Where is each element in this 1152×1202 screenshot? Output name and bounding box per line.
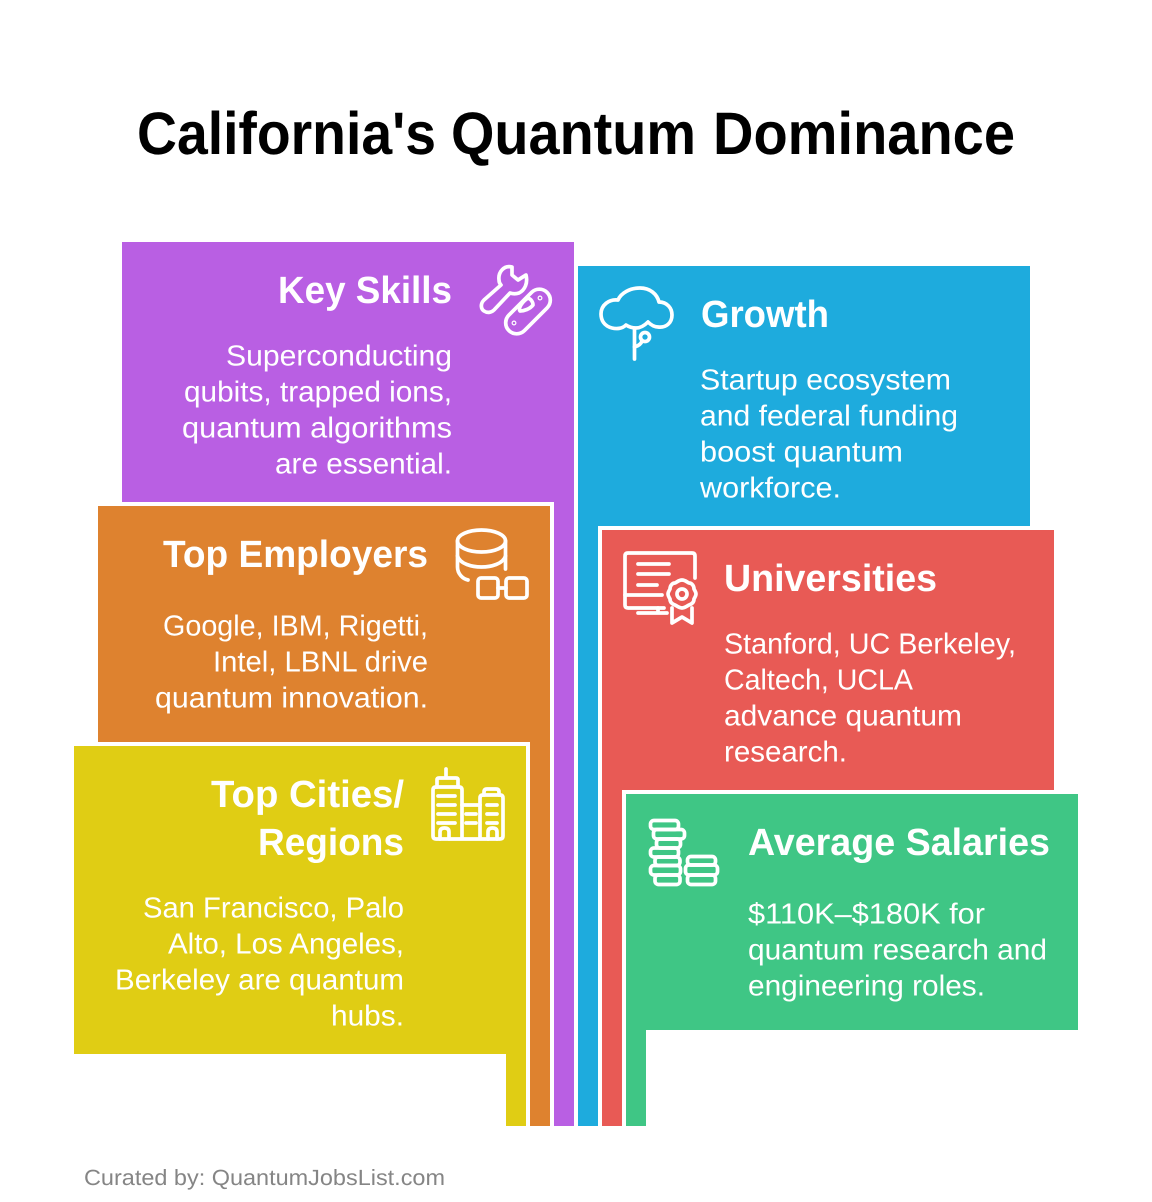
text: top employers description: Google, IBM, Rigetti, <box>163 610 428 642</box>
panel: top cities and regions <box>74 746 526 1126</box>
icon: coin stacks <box>650 820 718 884</box>
text: top cities description: Alto, Los Angeles, <box>168 928 404 960</box>
title: California's <box>137 100 436 167</box>
text: key skills description: are essential. <box>275 448 452 480</box>
text: average salaries description: quantum research and <box>748 934 1047 966</box>
text: universities description: advance quantum <box>724 700 962 732</box>
heading: top cities and regions: Top Cities/ <box>211 774 404 816</box>
text: top employers description: Intel, LBNL drive <box>213 646 428 678</box>
icon: certificate with ribbon <box>625 553 696 623</box>
text: key skills description <box>182 340 452 480</box>
icon: cloud tree <box>601 288 672 359</box>
heading: key skills: Key Skills <box>278 270 452 312</box>
heading: top cities and regions: Regions <box>258 822 404 864</box>
panel shape: average salaries <box>626 794 1078 1126</box>
text: top cities description: Berkeley are quantum <box>115 964 404 996</box>
text: growth description: Startup ecosystem <box>700 364 951 396</box>
text: average salaries description <box>748 898 1047 1002</box>
footer credit: Curated by: QuantumJobsList.com <box>84 1165 445 1190</box>
icon: city buildings <box>433 769 503 839</box>
text: top employers description: quantum innovation. <box>155 682 428 714</box>
text: growth description: workforce. <box>699 472 841 504</box>
title <box>137 100 1015 167</box>
panel: top employers <box>98 506 550 1126</box>
text: growth description: boost quantum <box>700 436 903 468</box>
panel: growth <box>578 266 1030 1126</box>
heading: universities: Universities <box>724 558 937 600</box>
panel: average salaries <box>626 794 1078 1126</box>
text: top cities description: hubs. <box>331 1000 404 1032</box>
panel shape: key skills <box>122 242 574 1126</box>
icon: database and glasses <box>458 530 527 598</box>
title: Dominance <box>713 100 1015 167</box>
text: key skills description: Superconducting <box>226 340 452 372</box>
text: average salaries description: $110K–$180K for <box>748 898 985 930</box>
text: universities description <box>724 628 1016 768</box>
text: top employers description <box>155 610 428 714</box>
text: key skills description: qubits, trapped ions, <box>184 376 452 408</box>
panel: universities <box>602 530 1054 1126</box>
panel shape: growth <box>578 266 1030 1126</box>
panel: key skills <box>122 242 574 1126</box>
icon: wrench and pocket knife <box>481 267 555 338</box>
text: growth description: and federal funding <box>700 400 958 432</box>
text: top cities description: San Francisco, Palo <box>143 892 404 924</box>
title: Quantum <box>451 100 696 167</box>
heading: average salaries: Average Salaries <box>748 822 1050 864</box>
panel shape: top employers <box>98 506 550 1126</box>
text: top cities description <box>115 892 404 1032</box>
heading: top employers: Top Employers <box>163 534 428 576</box>
panel shape: top cities <box>74 746 526 1126</box>
text: growth description <box>699 364 958 504</box>
heading: top cities and regions <box>211 774 404 864</box>
text: universities description: Caltech, UCLA <box>724 664 914 696</box>
text: key skills description: quantum algorithms <box>182 412 452 444</box>
text: universities description: Stanford, UC Berkeley, <box>724 628 1016 660</box>
text: universities description: research. <box>724 736 847 768</box>
text: average salaries description: engineering roles. <box>748 970 985 1002</box>
panel shape: universities <box>602 530 1054 1126</box>
heading: growth: Growth <box>701 294 829 336</box>
